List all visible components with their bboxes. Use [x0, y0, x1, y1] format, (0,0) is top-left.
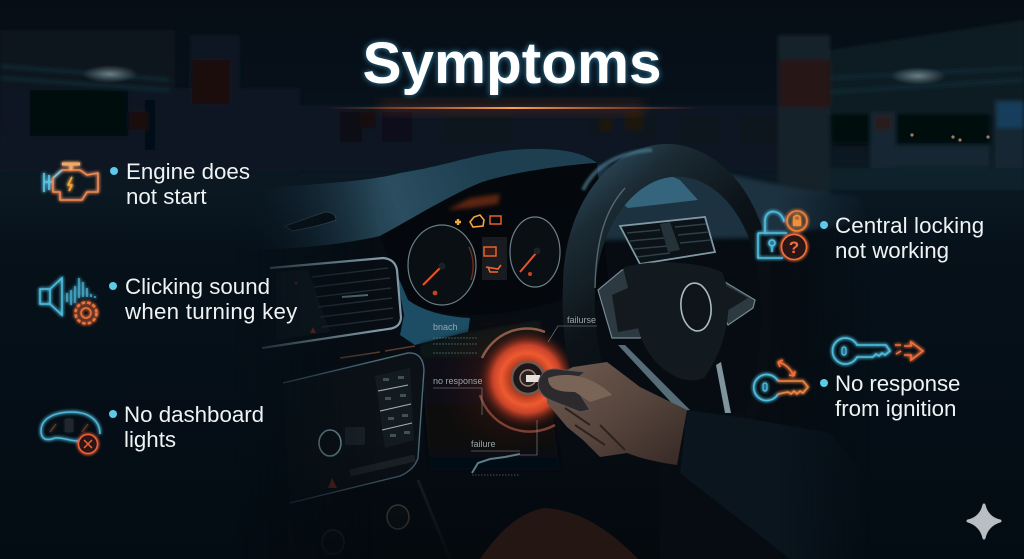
- symptom: no dashboard lights: [41, 402, 264, 454]
- label: not start: [126, 184, 207, 209]
- label: Engine does: [126, 159, 250, 184]
- warning lights: [455, 215, 507, 280]
- bullet: [109, 282, 117, 290]
- HUD labels: bnach: [433, 322, 458, 332]
- interior base: [358, 236, 782, 279]
- windscreen patch: [624, 177, 698, 208]
- label: Clicking sound: [125, 274, 270, 299]
- icon: speaker and gear: [40, 278, 96, 324]
- car interior: [235, 144, 870, 559]
- HUD labels: failure: [471, 439, 496, 449]
- left gauge: [408, 225, 476, 305]
- icon: question mark: ?: [789, 238, 799, 257]
- horn ring: [679, 282, 713, 332]
- wheel rim: [562, 144, 764, 368]
- icon: open lock: [758, 211, 807, 260]
- icon: key with broken arrow: [832, 338, 923, 364]
- label: lights: [124, 427, 176, 452]
- icon: sparkle watermark: [968, 505, 1000, 538]
- bullet: [820, 221, 828, 229]
- ignition glow: [456, 327, 570, 438]
- orange strip: [568, 318, 582, 364]
- red glow above lights: [447, 194, 500, 210]
- HUD labels: no response: [433, 376, 483, 386]
- right gauge: [510, 217, 560, 287]
- HUD labels: [433, 315, 597, 475]
- lower dark shading: [290, 450, 452, 559]
- steering wheel: [563, 144, 772, 430]
- wheel pad: [623, 262, 728, 380]
- icon: key with turn arrow: [754, 360, 808, 400]
- icon: engine: [44, 164, 98, 200]
- title: Symptoms: [362, 31, 662, 96]
- title underline glow: [380, 101, 644, 114]
- knee: [480, 508, 638, 559]
- cluster hood: [380, 163, 598, 236]
- dashboard top surface: [282, 148, 597, 248]
- defrost vent: [285, 212, 336, 231]
- mid panel: [418, 322, 540, 358]
- label: No dashboard: [124, 402, 264, 427]
- left air vent: [262, 258, 401, 348]
- bullet: [820, 379, 828, 387]
- label: not working: [835, 238, 949, 263]
- centre console: [283, 353, 450, 559]
- right vents: [620, 217, 715, 264]
- symptom: engine does not start: [44, 159, 250, 209]
- right dashboard: [590, 165, 870, 240]
- label: from ignition: [835, 396, 956, 421]
- symptom: clicking sound: [40, 274, 298, 324]
- symptom: no response from ignition: [754, 338, 960, 421]
- label: Central locking: [835, 213, 984, 238]
- bullet: [110, 167, 118, 175]
- symptom: central locking: [758, 211, 984, 263]
- jacket sleeve: [680, 410, 802, 559]
- HUD labels: failurse: [567, 315, 596, 325]
- bullet: [109, 410, 117, 418]
- title underline: [325, 107, 700, 109]
- icon: dashboard with x: [41, 412, 100, 454]
- wheel spokes: [598, 262, 755, 413]
- instrument cluster: [408, 194, 560, 305]
- label: when turning key: [124, 299, 298, 324]
- lower trim glint: [340, 346, 415, 358]
- hand with key fob: [538, 362, 687, 465]
- glossy panel: [398, 278, 470, 345]
- label: No response: [835, 371, 960, 396]
